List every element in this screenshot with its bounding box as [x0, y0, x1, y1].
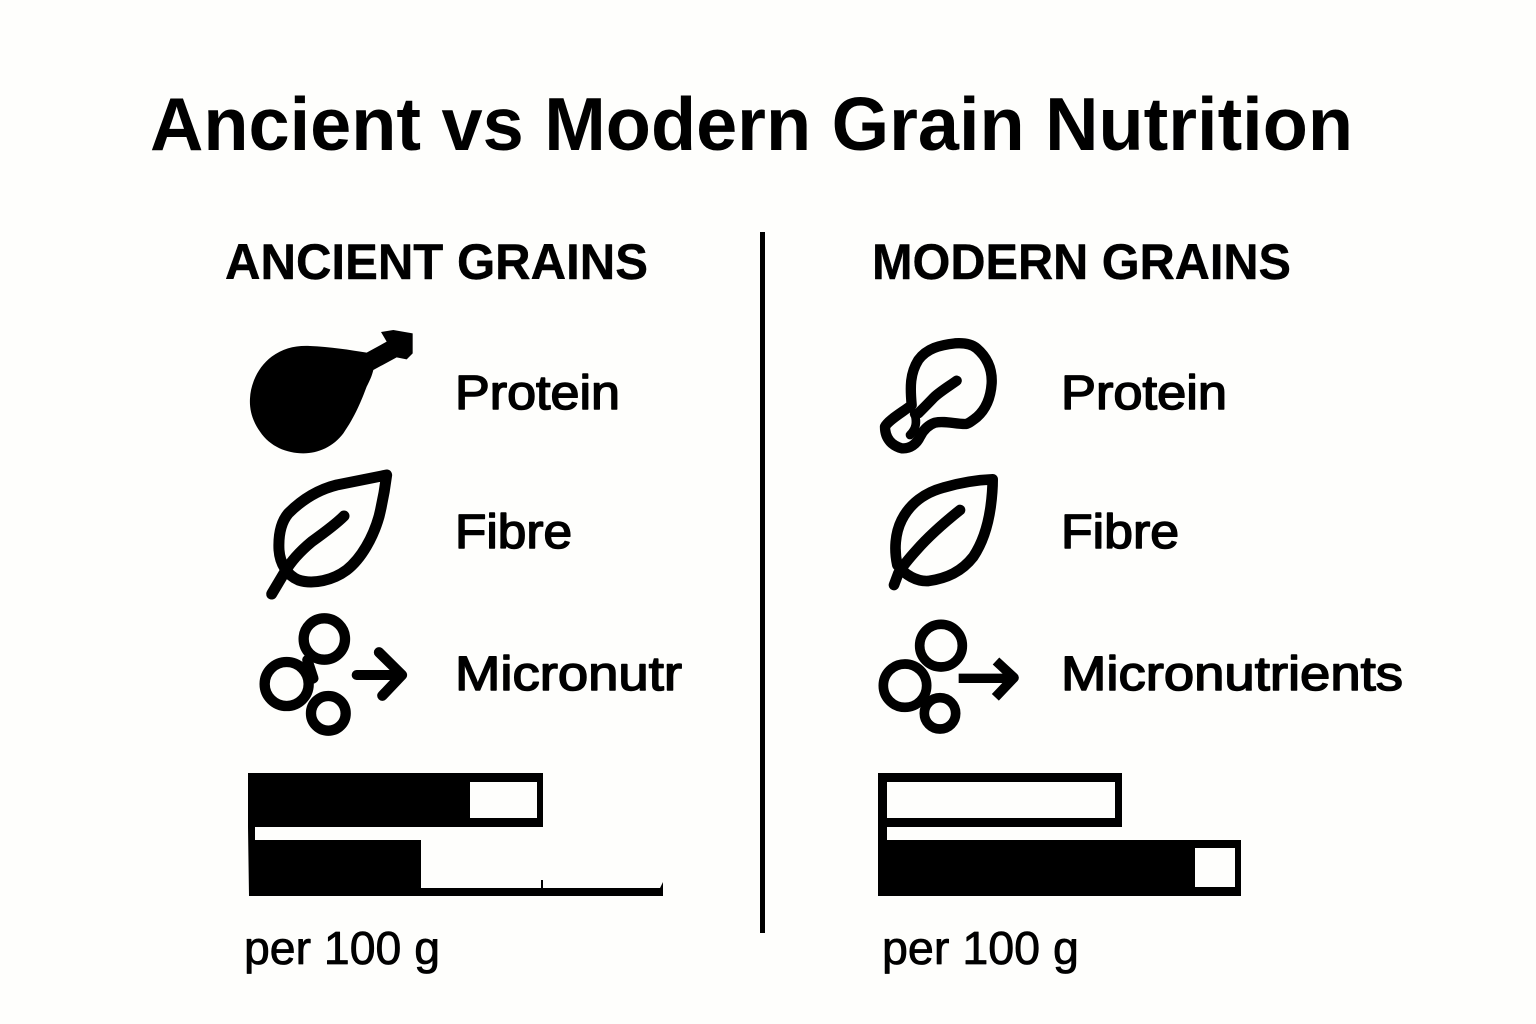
- icon: leaf outline: [272, 475, 387, 594]
- label: micronutrients: Micronutrients: [1061, 648, 1403, 701]
- icon: outlined drumstick: [885, 343, 992, 448]
- label: protein: Protein: [1061, 367, 1227, 420]
- center divider: [760, 232, 765, 933]
- label: fibre: Fibre: [455, 506, 572, 559]
- label: fibre: Fibre: [1061, 506, 1179, 559]
- bottom bar: [248, 827, 663, 896]
- top bar: [248, 773, 543, 827]
- heading: modern grains: MODERN GRAINS: [872, 234, 1291, 290]
- bar chart: modern grains: [878, 773, 1241, 896]
- bar chart: ancient grains: [248, 773, 663, 896]
- top bar: [878, 773, 1122, 827]
- label: micronutr: Micronutr: [455, 648, 682, 701]
- icon: micronutrient circles with arrow: [883, 624, 1014, 729]
- label: per 100 g: per 100 g: [244, 922, 440, 974]
- panel: ancient grains: [225, 234, 682, 974]
- label: protein: Protein: [455, 367, 620, 420]
- icon: solid drumstick: [250, 330, 413, 453]
- icon: leaf outline: [894, 479, 993, 585]
- panel: modern grains: [872, 234, 1403, 974]
- title: Ancient vs Modern Grain Nutrition: [150, 82, 1353, 166]
- heading: ancient grains: ANCIENT GRAINS: [225, 234, 648, 290]
- label: per 100 g: per 100 g: [882, 922, 1079, 974]
- bottom bar: [878, 827, 1241, 896]
- icon: micronutrient circles with arrow: [265, 618, 402, 731]
